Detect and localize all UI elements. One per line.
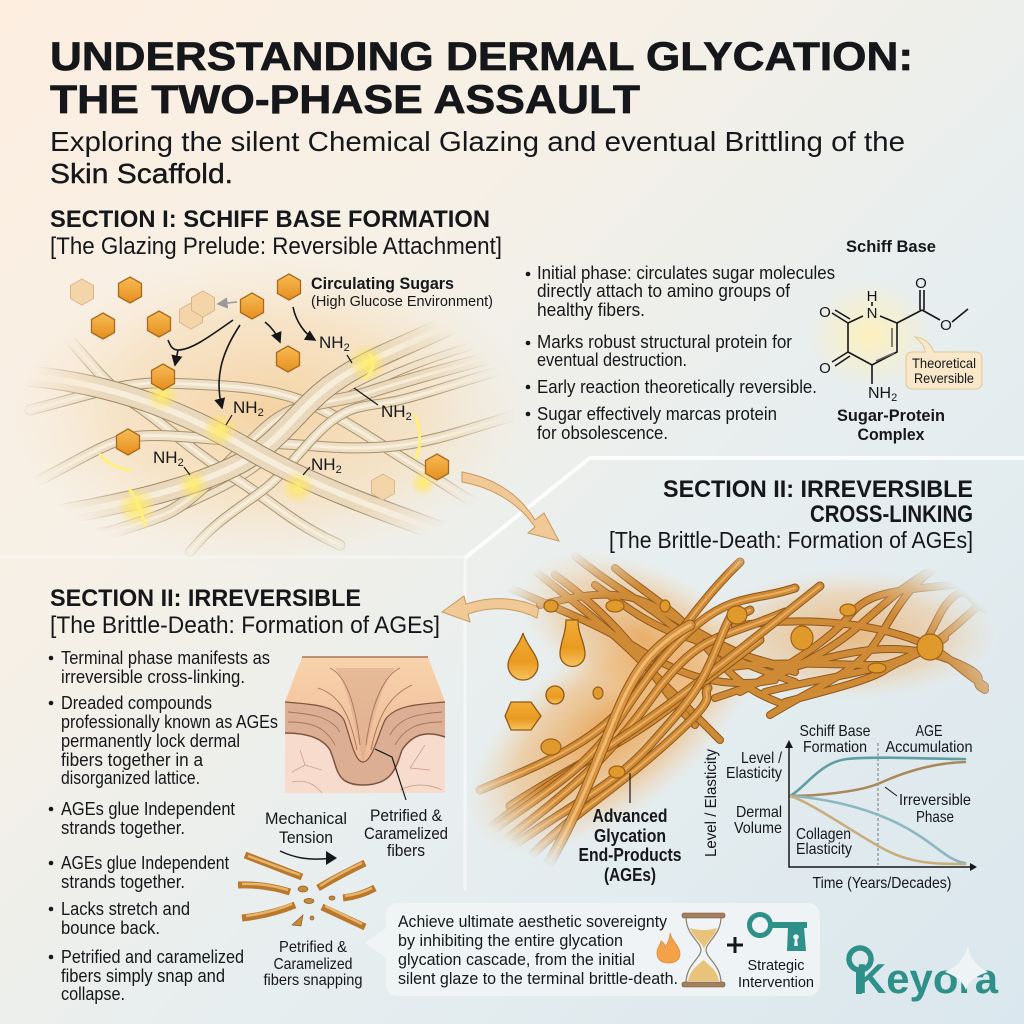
chart: level and elasticity over time: Volume [734, 820, 782, 837]
heading: section I: SECTION I: SCHIFF BASE FORMATION [50, 206, 490, 233]
NH2 labels: NH [319, 333, 344, 352]
icon: key [750, 914, 807, 951]
bullets: section II: professionally known as AGEs [61, 712, 278, 732]
chart: level and elasticity over time: Elasticity [796, 841, 852, 858]
bullets: section II [49, 648, 278, 1004]
logo: Keyora: Keyora [856, 955, 999, 1002]
NH2 labels: 2 [178, 457, 184, 469]
chart: level and elasticity over time: Time (Years/Decades) [812, 875, 952, 892]
illustration: collagen fibers with circulating sugars [24, 273, 513, 557]
molecule: schiff base: Sugar-Protein [837, 406, 945, 425]
label: advanced glycation end-products: End-Products [578, 845, 682, 865]
bullets: section II: permanently lock dermal [61, 731, 240, 751]
molecule: schiff base: O [915, 275, 927, 292]
molecule: schiff base [808, 237, 982, 444]
label: mechanical tension: Mechanical [265, 809, 347, 828]
illustration: skin wrinkle cross-section: fibers [387, 841, 425, 860]
cross-link blobs [541, 600, 943, 778]
molecule: schiff base: N [867, 305, 877, 322]
bullets: section II: collapse. [61, 984, 125, 1004]
NH2 labels: 2 [336, 464, 342, 476]
illustration: skin wrinkle cross-section: Petrified & [370, 806, 443, 825]
bullets: section I: for obsolescence. [537, 423, 668, 443]
NH2 labels: NH [381, 402, 406, 421]
NH2 labels: 2 [344, 342, 350, 354]
icon: hourglass [682, 913, 725, 987]
NH2 labels: NH [311, 455, 336, 474]
callout: strategic intervention: glycation cascade, from the initial [398, 950, 635, 969]
molecule: schiff base: O [940, 317, 952, 334]
bullets: section I: Initial phase: circulates sugar molecules [537, 263, 835, 283]
heading: section II right: [The Brittle-Death: Formation of AGEs] [609, 527, 973, 553]
label: advanced glycation end-products: (AGEs) [604, 865, 656, 885]
bullets: section II: Petrified and caramelized [61, 947, 244, 967]
section dividers [0, 458, 1024, 890]
molecule: schiff base: 2 [891, 392, 897, 404]
label: mechanical tension: Tension [279, 828, 333, 847]
callout: theoretical reversible: Theoretical [912, 355, 976, 371]
bullets: section II: Dreaded compounds [61, 693, 212, 713]
bullets: section II: strands together. [61, 818, 185, 838]
glycation glow points [100, 343, 436, 527]
molecule: schiff base: NH [868, 385, 891, 402]
callout: theoretical reversible [906, 337, 982, 389]
NH2 labels [153, 333, 412, 476]
NH2 labels: 2 [406, 411, 412, 423]
bullets: section I [526, 263, 835, 443]
label: circulating sugars: (High Glucose Environment) [311, 293, 493, 310]
callout: strategic intervention: Strategic [748, 957, 805, 974]
heading: section II right: SECTION II: IRREVERSIBLE [663, 476, 973, 503]
chart: level and elasticity over time: Irreversible [899, 792, 971, 809]
heading: section I: [The Glazing Prelude: Reversible Attachment] [50, 233, 502, 260]
molecule: schiff base: Complex [858, 425, 925, 444]
title: UNDERSTANDING DERMAL GLYCATION: [50, 35, 913, 79]
callout: strategic intervention: by inhibiting the entire glycation [398, 931, 623, 950]
heading: section II right [609, 476, 973, 553]
title [50, 35, 913, 122]
callout: theoretical reversible: Reversible [914, 370, 974, 386]
chart: level and elasticity over time: Phase [916, 809, 954, 826]
chart: level and elasticity over time [703, 723, 977, 892]
bullets: section II: bounce back. [61, 918, 160, 938]
illustration: snapped fibers: Petrified & [279, 939, 347, 956]
chart: level and elasticity over time: Collagen [796, 826, 851, 843]
chart: level and elasticity over time: Elasticity [726, 765, 782, 782]
chart: level and elasticity over time: Formation [803, 739, 867, 756]
sugar molecules [92, 274, 448, 480]
icon: plus [727, 937, 743, 953]
bullets: section I: Sugar effectively marcas protein [537, 404, 777, 424]
label: circulating sugars [311, 274, 493, 310]
bullets: section I: directly attach to amino groups of [537, 281, 791, 301]
heading: section II left [50, 585, 440, 639]
bullets: section II: fibers simply snap and [61, 966, 225, 986]
title: THE TWO-PHASE ASSAULT [50, 78, 640, 122]
molecule: schiff base: Schiff Base [846, 237, 936, 256]
illustration: snapped fibers [238, 855, 375, 989]
label: advanced glycation end-products: Advanced [592, 806, 668, 826]
bullets: section I: Marks robust structural protein for [537, 332, 792, 352]
subtitle: Exploring the silent Chemical Glazing and eventual Brittling of the [50, 126, 905, 157]
bullets: section I: eventual destruction. [537, 350, 687, 370]
bullets: section II: fibers together in a [61, 750, 204, 770]
subtitle: Skin Scaffold. [50, 158, 233, 189]
illustration: snapped fibers: Caramelized [274, 956, 352, 973]
NH2 labels: NH [233, 398, 258, 417]
chart: level and elasticity over time: Level / Elasticity [703, 749, 720, 857]
bullets: section II: AGEs glue Independent [61, 853, 229, 873]
chart: level and elasticity over time: Schiff Base [800, 723, 871, 740]
molecule: schiff base: O [819, 304, 831, 321]
bullets: section II: AGEs glue Independent [61, 799, 235, 819]
illustration: cross-linked AGE fibers [476, 552, 989, 885]
pale sugars [70, 279, 394, 500]
molecule: schiff base: O [819, 360, 831, 377]
subtitle [50, 126, 905, 189]
bullets: section II: irreversible cross-linking. [61, 667, 245, 687]
bullets: section II: strands together. [61, 872, 185, 892]
label: circulating sugars: Circulating Sugars [311, 274, 454, 293]
heading: section II left: SECTION II: IRREVERSIBLE [50, 585, 361, 612]
callout: strategic intervention: Intervention [738, 974, 814, 991]
label: advanced glycation end-products: Glycation [594, 826, 666, 846]
chart: level and elasticity over time: Dermal [736, 804, 782, 821]
molecule: schiff base: H [867, 288, 877, 305]
amber drops [505, 620, 585, 730]
chart: level and elasticity over time: AGE [916, 723, 942, 740]
arrow: section II right to left [442, 596, 539, 622]
bullets: section I: healthy fibers. [537, 300, 645, 320]
bullets: section I: Early reaction theoretically reversible. [537, 377, 817, 397]
chart: level and elasticity over time: Accumulation [886, 739, 972, 756]
callout: strategic intervention: silent glaze to the terminal brittle-death. [398, 969, 678, 988]
label: advanced glycation end-products [578, 773, 682, 885]
NH2 labels: 2 [258, 407, 264, 419]
callout: strategic intervention [365, 903, 820, 996]
label: mechanical tension [265, 809, 347, 865]
illustration: snapped fibers: fibers snapping [264, 972, 362, 989]
illustration: skin wrinkle cross-section: Caramelized [364, 824, 448, 843]
arrow: section I to section II [462, 472, 559, 541]
icon: flame [657, 933, 680, 963]
heading: section I [50, 206, 502, 260]
heading: section II left: [The Brittle-Death: Formation of AGEs] [50, 612, 440, 639]
NH2 labels: NH [153, 448, 178, 467]
chart: level and elasticity over time: Level / [741, 750, 782, 767]
attachment arrows [168, 302, 378, 475]
illustration: skin wrinkle cross-section [285, 657, 448, 860]
bullets: section II: Terminal phase manifests as [61, 648, 270, 668]
bullets: section II: disorganized lattice. [61, 768, 200, 788]
callout: strategic intervention: Achieve ultimate aesthetic sovereignty [398, 912, 667, 931]
heading: section II right: CROSS-LINKING [810, 501, 973, 528]
bullets: section II: Lacks stretch and [61, 899, 190, 919]
